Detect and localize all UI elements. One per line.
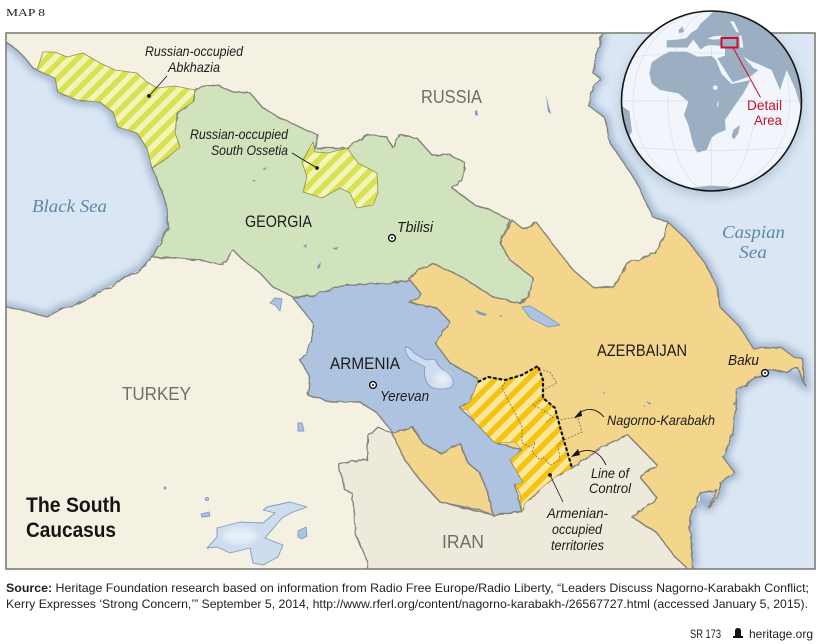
occupied zone: Abkhazia (37, 52, 195, 168)
line of control (478, 366, 572, 468)
detail area marker (722, 38, 782, 128)
source note: Kerry Expresses ‘Strong Concern,’” September 5, 2014, http://www.rferl.org/content/nagorno-karabakh-/26567727.html (accessed January 5, 2015). (6, 597, 808, 611)
country label: Georgia: GEORGIA (245, 212, 313, 231)
source note (6, 581, 809, 611)
callout: Nagorno-Karabakh: Nagorno-Karabakh (607, 412, 715, 428)
globe rim (622, 11, 802, 191)
capital: Tbilisi (389, 219, 434, 241)
globe inland water (707, 21, 743, 107)
callout: Abkhazia (145, 43, 244, 98)
lake: Mingachevir (522, 306, 560, 327)
callout: Nagorno-Karabakh (574, 409, 715, 428)
title: The South (26, 494, 121, 517)
capital: Yerevan (370, 382, 429, 405)
globe locator (618, 8, 810, 197)
country label: Russia: RUSSIA (421, 87, 482, 107)
capital: Tbilisi: Tbilisi (397, 219, 434, 236)
callout: South Ossetia: Russian-occupied (190, 126, 289, 142)
callout: South Ossetia: South Ossetia (211, 142, 288, 158)
title: Caucasus (26, 519, 116, 542)
country: Azerbaijan (408, 220, 805, 575)
source note: Source: Heritage Foundation research based on information from Radio Free Europe/Radio Liberty, “Leaders Discuss Nagorno-Karabakh Conflict; (6, 581, 809, 595)
Nagorno-Karabakh boundary (502, 370, 582, 465)
callout: Armenian-occupied territories (546, 473, 608, 553)
country label: Azerbaijan: AZERBAIJAN (597, 341, 687, 360)
sea label: Caspian Sea: Sea (739, 242, 767, 262)
globe graticule (621, 11, 801, 191)
detail area marker: Detail (747, 97, 782, 113)
footer: report number and site: SR 173 (690, 627, 721, 641)
lakes and reservoirs (164, 95, 737, 565)
callout: Armenian-occupied territories: Armenian- (546, 505, 608, 521)
title (26, 494, 121, 542)
coastlines (0, 30, 668, 317)
callout: Abkhazia: Abkhazia (167, 59, 220, 75)
capital: Baku: Baku (728, 352, 760, 369)
callout: South Ossetia (190, 126, 319, 170)
country: Georgia (152, 85, 533, 303)
lake: Sevan (405, 347, 453, 389)
sea label: Caspian Sea: Caspian (722, 222, 785, 242)
sea label: Black Sea: Black Sea (32, 196, 107, 216)
lake: Van (207, 502, 307, 565)
occupied zone: Armenian-occupied territories (460, 366, 572, 512)
occupied zone: South Ossetia (302, 142, 378, 208)
callout: Line of Control (571, 449, 632, 496)
figure number: MAP 8 (6, 7, 46, 19)
country label: Turkey: TURKEY (122, 384, 191, 404)
callout: Armenian-occupied territories: territories (551, 537, 604, 553)
callout: Armenian-occupied territories: occupied (552, 521, 603, 537)
icon: bell (733, 628, 743, 638)
country label: Armenia: ARMENIA (330, 354, 401, 373)
footer: report number and site (690, 627, 813, 641)
detail area marker: Area (754, 112, 782, 128)
sea label: Caspian Sea (722, 222, 785, 262)
country label: Iran: IRAN (442, 532, 484, 552)
callout: Abkhazia: Russian-occupied (145, 43, 244, 59)
country: Armenia (293, 280, 523, 515)
Nakhchivan exclave (392, 427, 493, 515)
callout: Line of Control: Control (589, 480, 632, 496)
footer: report number and site: heritage.org (749, 627, 813, 641)
country: Iran (338, 427, 698, 575)
capital: Yerevan: Yerevan (380, 388, 429, 405)
globe land (618, 8, 810, 193)
capital: Baku (728, 352, 768, 376)
callout: Line of Control: Line of (591, 465, 631, 481)
